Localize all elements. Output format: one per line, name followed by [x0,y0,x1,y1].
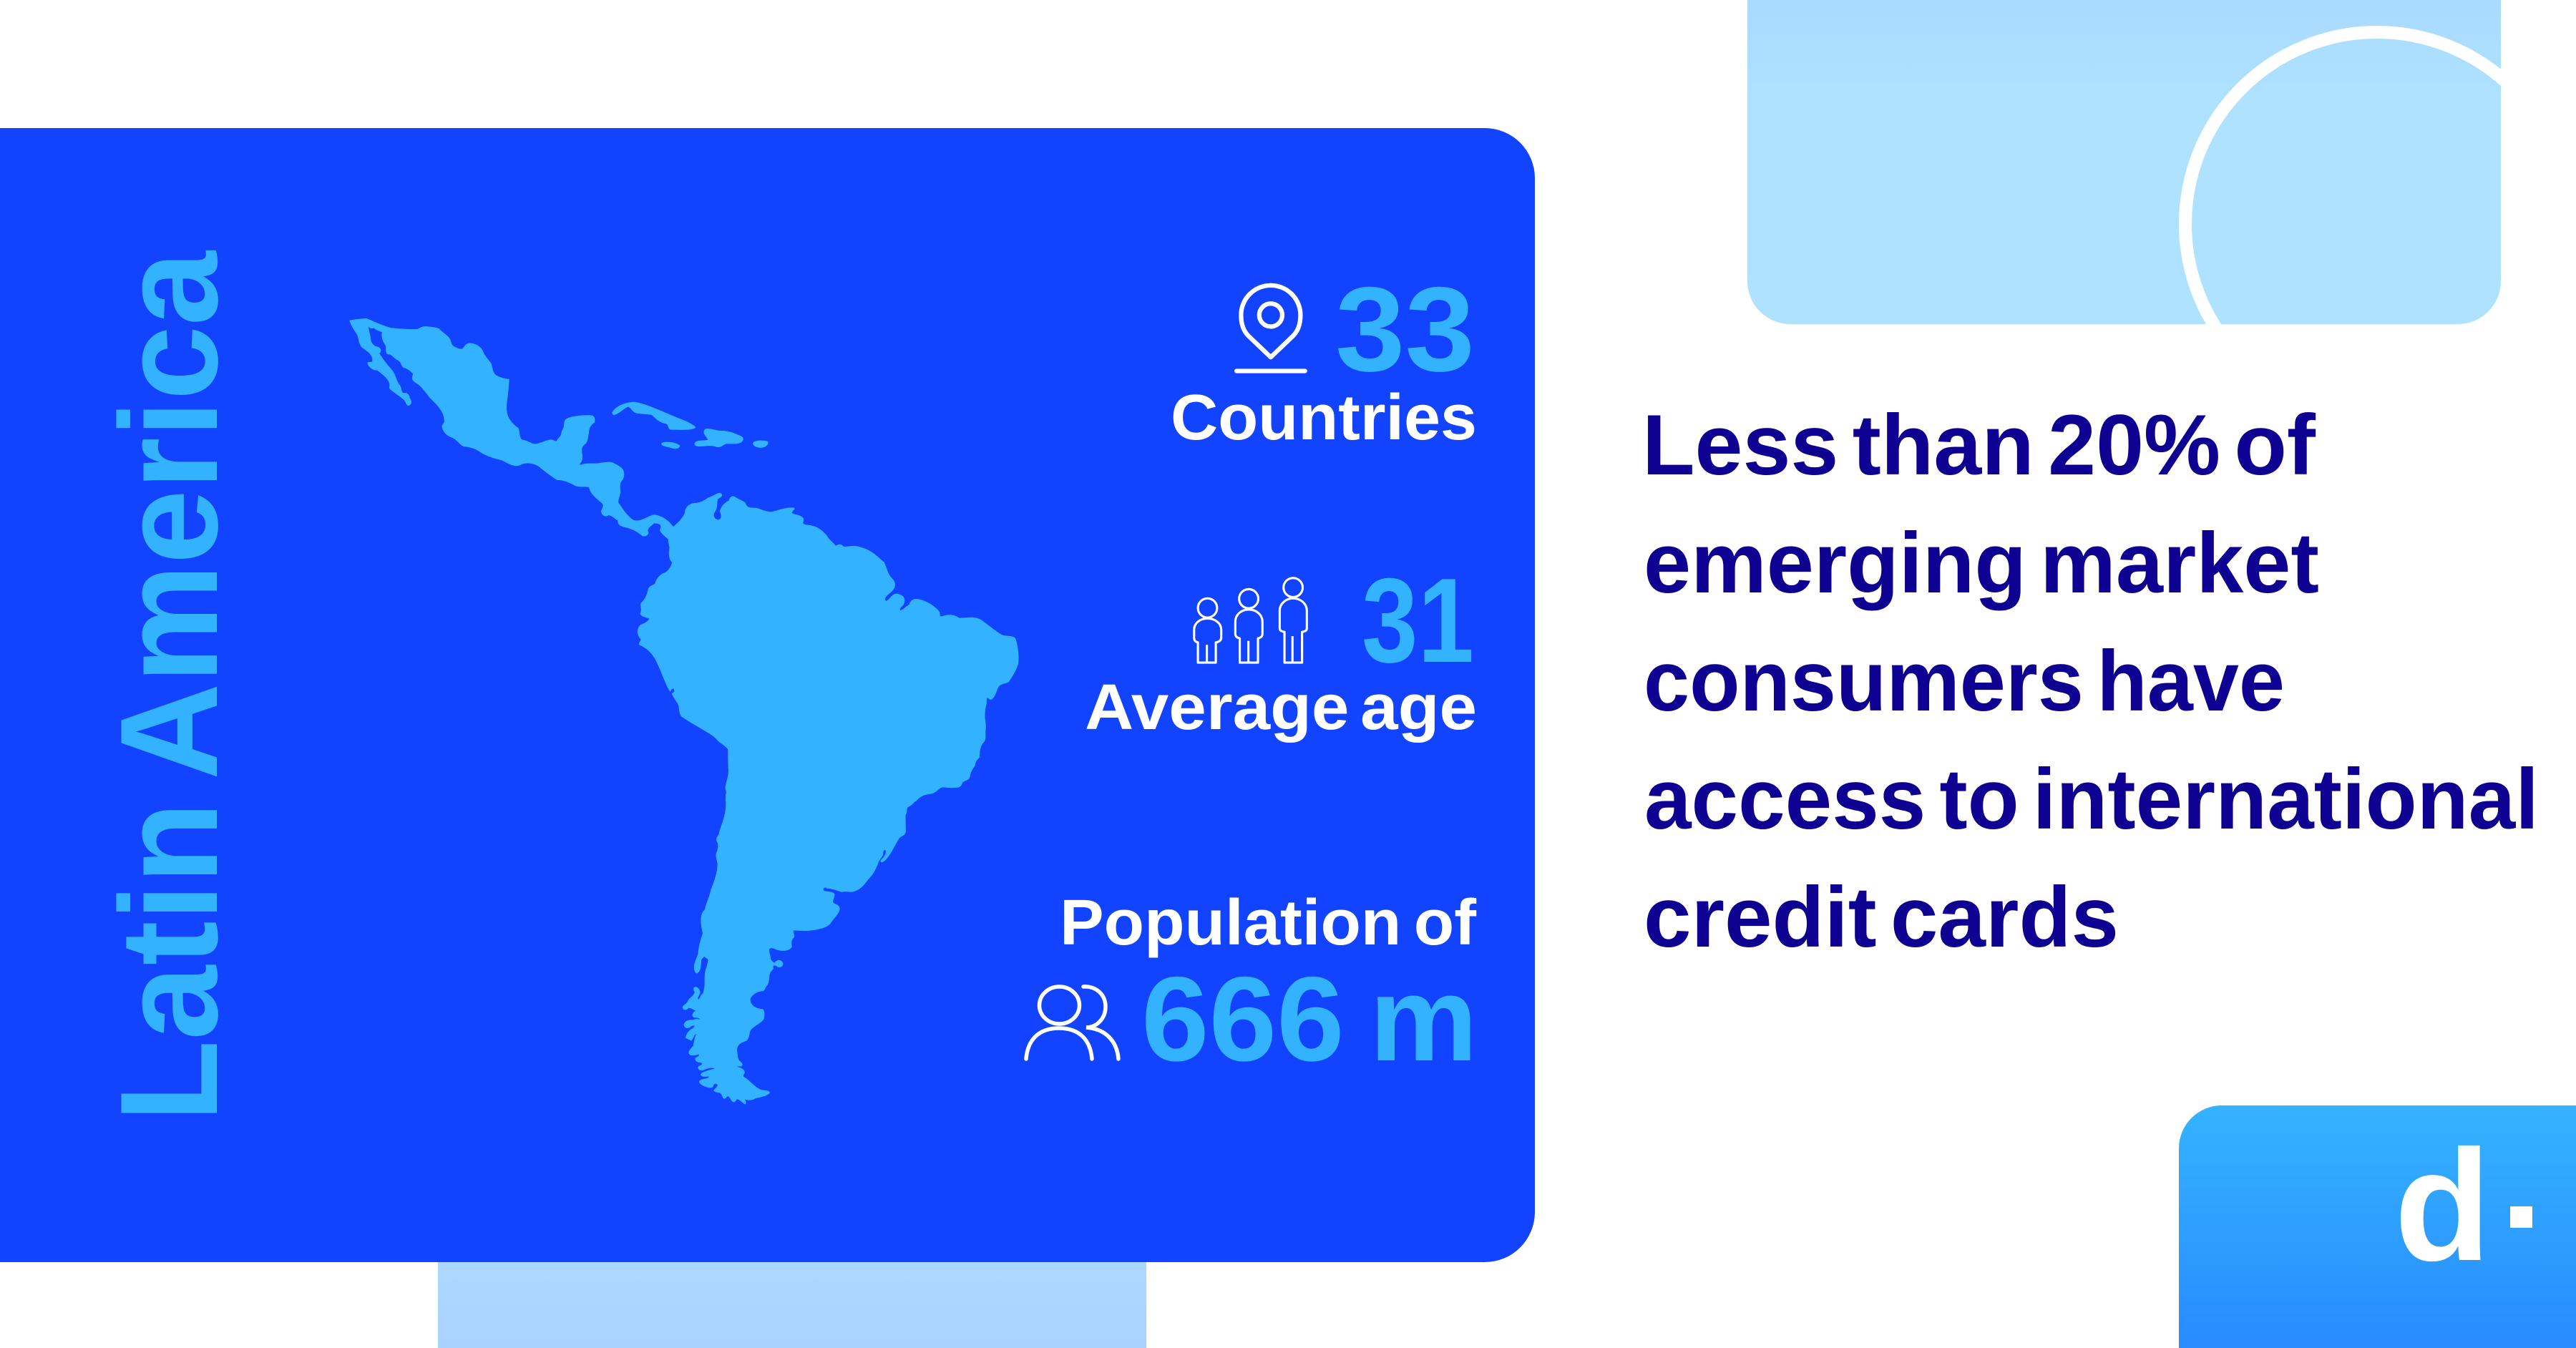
map: Mexico, Central America and northern South America [349,318,1019,801]
panel: logo card [2179,1105,2576,1348]
number: 666 m: 666 m [1141,952,1478,1086]
number: 33: 33 [1335,262,1475,396]
logo: d letter: d [2394,1117,2491,1294]
label: Average age: Average age [1085,672,1477,743]
text block: headline statement: consumers have [1644,633,2285,729]
text block: headline statement: access to international [1644,751,2539,847]
icon: three people of growing height [1194,578,1307,663]
number: 31: 31 [1362,553,1474,688]
text block: headline statement: credit cards [1644,869,2119,965]
icon: location pin [1236,285,1305,371]
label: Countries: Countries [1171,382,1477,454]
panel: top right light blue card with ring [1747,0,2569,416]
panel: bottom light blue tab [438,1216,1146,1348]
map: Latin America [349,318,1019,1104]
icon: two people [1026,987,1118,1059]
stat: 31 average age [1085,553,1477,743]
heading: Latin America: Latin America [92,250,247,1122]
text block: headline statement [1642,397,2539,965]
text block: headline statement: emerging market [1644,515,2319,611]
stat: 33 countries [1171,262,1477,454]
stat: population of 666 m [1026,887,1478,1086]
logo: square dot [2510,1206,2532,1228]
label: Population of: Population of [1060,887,1477,959]
panel: Latin America main blue card [0,128,1535,1262]
map: southern South America [681,715,986,1104]
text block: headline statement: Less than 20% of [1642,397,2316,493]
